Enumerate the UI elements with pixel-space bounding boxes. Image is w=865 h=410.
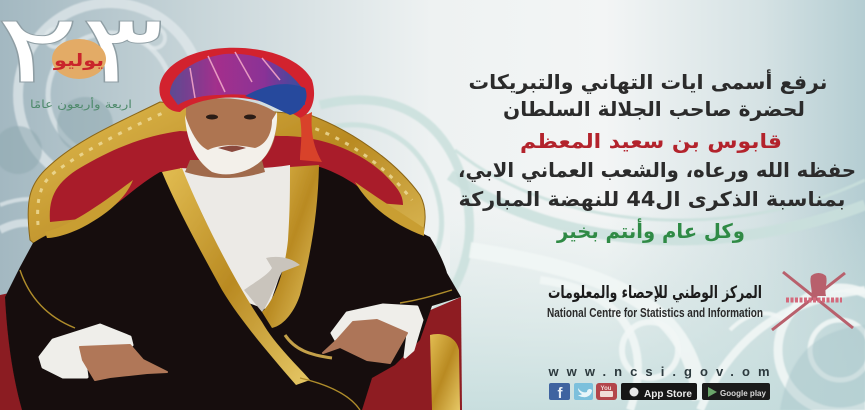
portrait of the Sultan on throne xyxy=(0,48,462,410)
throne red upholstery xyxy=(50,131,403,222)
white beard and hair xyxy=(185,112,277,174)
line 6: وكل عام وأنتم بخير xyxy=(556,217,745,243)
icon: national emblem xyxy=(772,272,853,330)
anniversary caption: اربعة وأربعون عامًا xyxy=(30,97,132,111)
left hand xyxy=(80,345,167,380)
face xyxy=(186,98,276,172)
icon: facebook: f xyxy=(558,385,564,402)
icon: twitter xyxy=(574,383,593,400)
month badge: يوليو xyxy=(53,51,104,71)
khanjar dagger xyxy=(244,257,300,312)
line 2: لحضرة صاحب الجلالة السلطان xyxy=(503,97,805,121)
eyes and mouth xyxy=(206,114,256,152)
thin gold robe edging xyxy=(20,270,452,410)
lower background tint xyxy=(450,210,865,410)
turban tail xyxy=(300,112,322,162)
icon: youtube xyxy=(596,383,617,400)
button: App Store xyxy=(621,383,697,400)
icon: youtube: You xyxy=(601,386,612,392)
neck xyxy=(185,160,265,178)
Arabic name: المركز الوطني للإحصاء والمعلومات xyxy=(548,283,762,303)
throne gold back xyxy=(28,102,425,300)
website address: www.ncsi.gov.om xyxy=(548,364,770,379)
throne gold carving texture xyxy=(38,112,412,225)
month badge xyxy=(52,39,106,79)
button: Google play: Google play xyxy=(720,388,766,398)
throne lower red arms xyxy=(0,290,462,410)
turban xyxy=(159,48,314,118)
button: Google play xyxy=(702,383,770,400)
right sleeve cuff xyxy=(332,305,422,357)
greeting message xyxy=(458,68,856,243)
organisation name xyxy=(547,283,763,320)
line 3 ruler name: قابوس بن سعيد المعظم xyxy=(520,129,782,153)
line 4: حفظه الله ورعاه، والشعب العماني الابي، xyxy=(458,158,856,183)
right hand xyxy=(323,320,407,363)
black robe xyxy=(5,167,461,410)
left sleeve cuff xyxy=(40,325,132,377)
white dishdasha xyxy=(180,165,292,310)
social and store buttons xyxy=(549,383,770,402)
gold collar left xyxy=(162,168,310,385)
English name: National Centre for Statistics and Information xyxy=(547,305,763,320)
gold belt chain xyxy=(285,335,332,358)
line 5: بمناسبة الذكرى ال44 للنهضة المباركة xyxy=(458,187,846,211)
line 1: نرفع أسمى ايات التهاني والتبريكات xyxy=(468,68,828,95)
icon: facebook xyxy=(549,383,570,402)
gold trim on shoulders xyxy=(45,180,424,238)
button: App Store: App Store xyxy=(644,389,692,400)
gold collar right xyxy=(262,165,319,328)
